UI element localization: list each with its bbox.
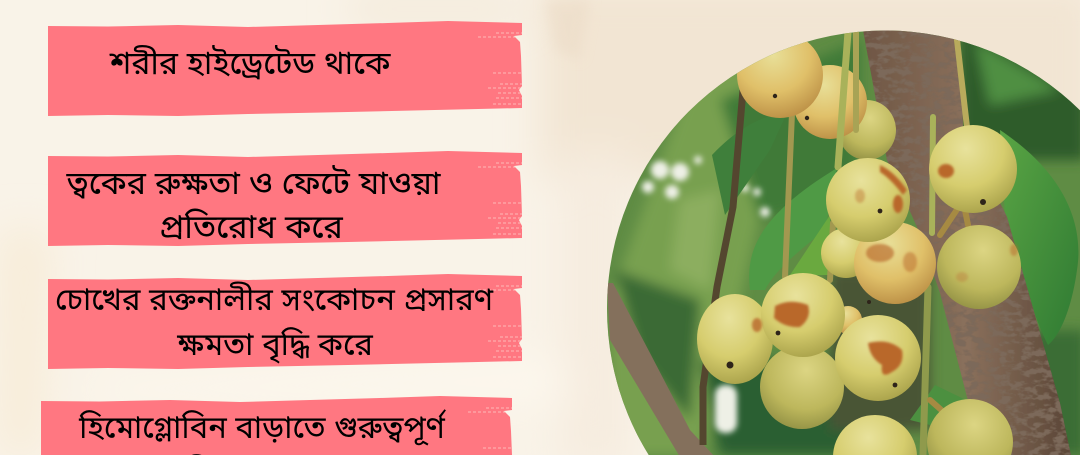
text 2: প্রতিরোধ করে (159, 207, 343, 245)
tree trunk (863, 30, 1072, 455)
brush strip 1 (48, 21, 522, 116)
fruit cluster (697, 32, 1021, 455)
photo: circular fruit image (600, 20, 1080, 455)
brush strip 4 (41, 396, 512, 455)
brown spots (752, 164, 1018, 375)
brush streaks 1 (478, 33, 522, 104)
leaves (1000, 130, 1078, 345)
panel: benefit 1 (48, 21, 522, 116)
thin dark branch (703, 90, 743, 445)
brush streaks 3 (478, 286, 522, 357)
text 2: ত্বকের রুক্ষতা ও ফেটে যাওয়া (65, 165, 441, 201)
back fruits (843, 100, 896, 159)
text 3: চোখের রক্তনালীর সংকোচন প্রসারণ (55, 281, 494, 317)
text 3: ক্ষমতা বৃদ্ধি করে (176, 326, 373, 364)
brush streaks 2 (478, 163, 522, 234)
fruit tips (726, 94, 986, 387)
foliage background (610, 30, 1080, 455)
white bokeh (642, 156, 770, 433)
lower-left branch (607, 283, 715, 455)
brush strip 2 (48, 151, 522, 246)
brush strip 3 (48, 274, 522, 369)
panel: benefit 4 (41, 396, 512, 455)
text 1: শরীর হাইড্রেটেড থাকে (109, 45, 392, 81)
text 4: হিমোগ্লোবিন বাড়াতে গুরুত্বপূর্ণ (78, 409, 446, 446)
brush streaks 4 (468, 408, 512, 448)
panel: benefit 3 (48, 274, 522, 369)
panel: benefit 2 (48, 151, 522, 246)
stems (785, 32, 968, 455)
